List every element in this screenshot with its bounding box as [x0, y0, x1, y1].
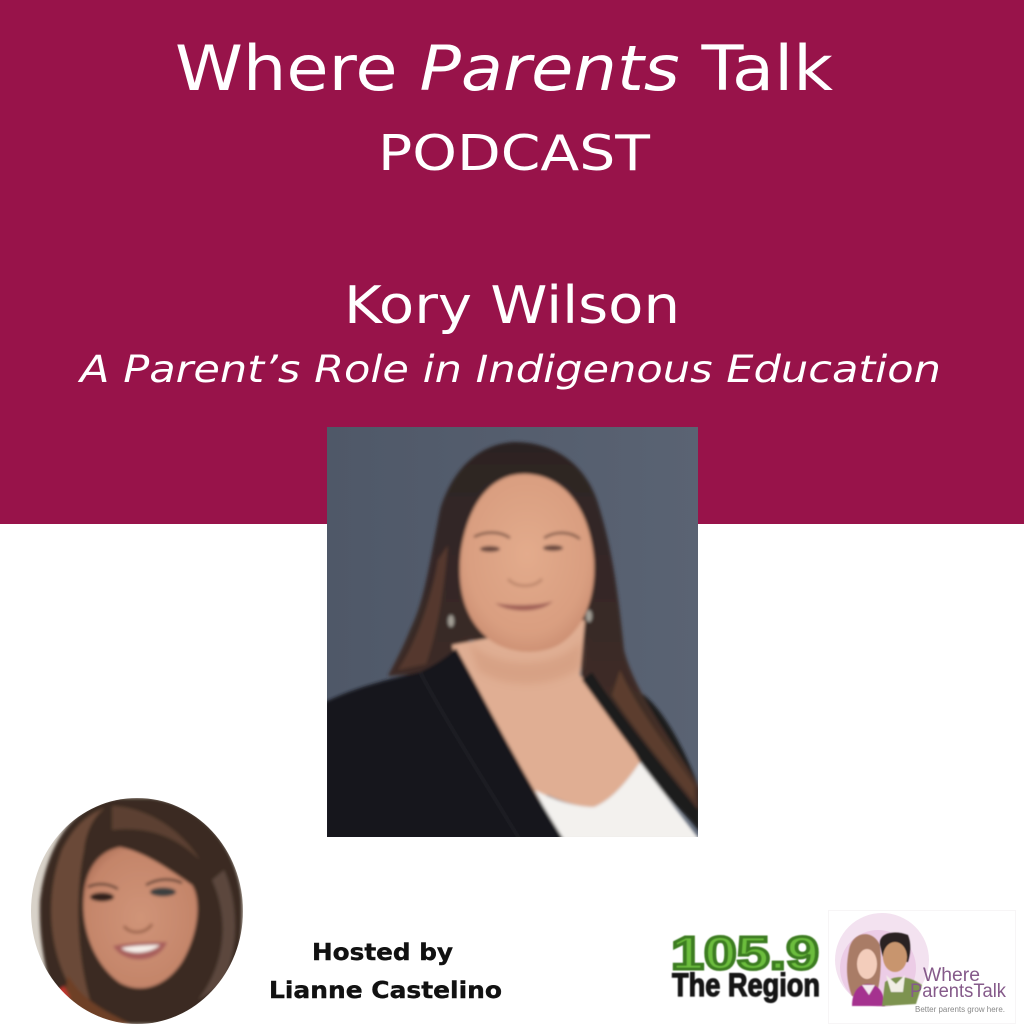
logo frame [828, 910, 1016, 1024]
station frequency: 105.9 [671, 927, 819, 979]
red top accent [56, 986, 70, 1000]
guest portrait: Kory Wilson [325, 427, 700, 840]
nose shading [508, 579, 542, 586]
neck shadow [474, 648, 586, 683]
host hair right highlight [198, 870, 235, 1000]
guest name: Kory Wilson: Kory Wilson [344, 276, 680, 336]
right hair highlight [612, 670, 694, 800]
station name: The Region [672, 967, 820, 1003]
hosted by label: Hosted by [312, 940, 453, 966]
eyes [480, 546, 500, 552]
host hair [40, 798, 242, 1024]
right jacket shoulder [637, 694, 698, 817]
host hair lower copper tone [64, 978, 130, 1024]
black jacket left [325, 648, 564, 840]
cartoon mother [847, 934, 885, 1006]
lapel fold [420, 672, 520, 840]
face [460, 474, 594, 652]
logo: 105.9 The Region [671, 927, 820, 1003]
eyebrows [474, 533, 580, 539]
title: Where Parents Talk: Where Parents Talk [175, 32, 833, 105]
left hair highlight [398, 545, 448, 670]
host teeth [121, 945, 160, 953]
host face [83, 847, 197, 988]
logo wordmark second line: ParentsTalk [910, 981, 1006, 1002]
maroon header band [0, 0, 1024, 524]
smile [495, 601, 553, 611]
cartoon father [880, 932, 922, 1006]
white blouse [535, 762, 700, 840]
hair [388, 442, 698, 815]
right lapel [582, 672, 700, 832]
host portrait: Lianne Castelino [25, 798, 245, 1024]
host name: Lianne Castelino [269, 978, 502, 1004]
logo wordmark: Where [923, 965, 980, 986]
host eyes [90, 892, 114, 902]
episode title: A Parent’s Role in Indigenous Education [78, 348, 941, 391]
host hair crown highlight [112, 806, 200, 860]
host nose [124, 924, 152, 932]
logo tagline: Better parents grow here. [915, 1005, 1005, 1014]
logo: Where Parents Talk [828, 910, 1016, 1024]
earrings [448, 615, 454, 627]
host lips [113, 942, 167, 959]
host eyebrows [88, 879, 182, 889]
subtitle: PODCAST: PODCAST [378, 125, 651, 182]
neck and chest [452, 620, 640, 820]
host credit [269, 940, 502, 1004]
host hair left highlight [51, 808, 105, 1000]
logo pink circles [835, 913, 929, 1007]
